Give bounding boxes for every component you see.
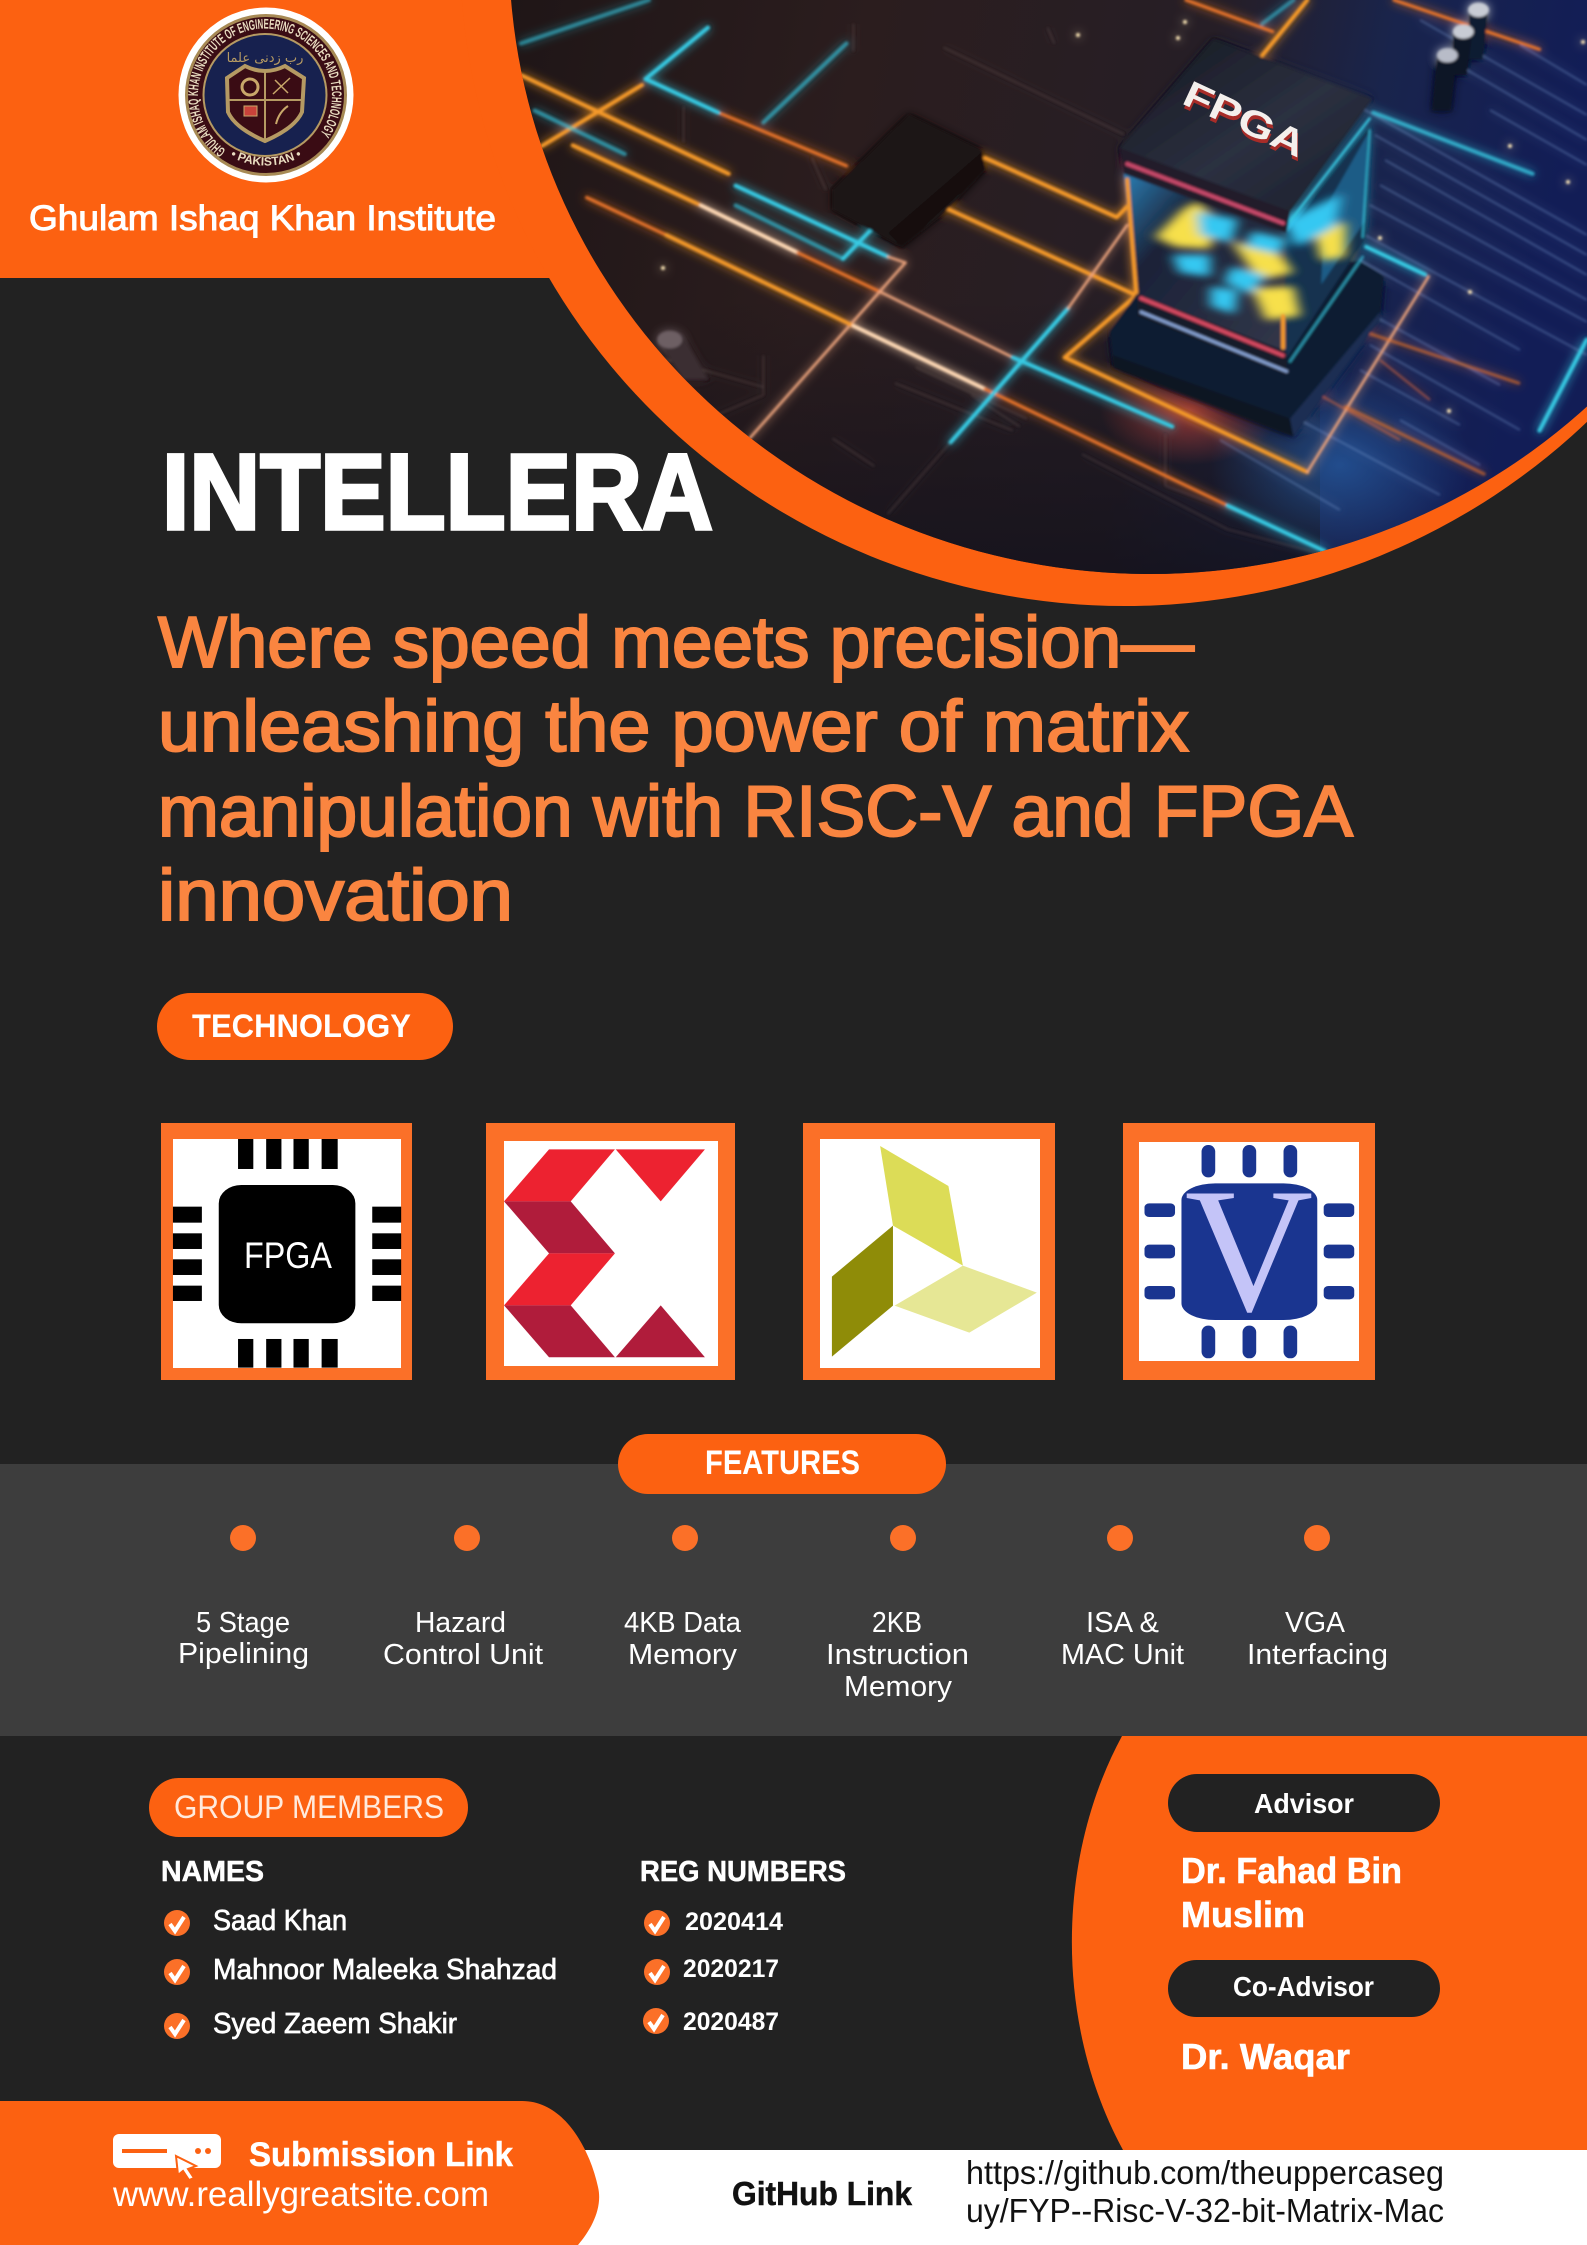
cyan traces	[646, 79, 718, 113]
tagline: innovation	[158, 856, 513, 936]
github url	[966, 2154, 1444, 2229]
large chip body	[1124, 174, 1287, 363]
advisor name: Muslim	[1181, 1894, 1305, 1935]
orange traces	[521, 75, 729, 174]
registration numbers list: 2020487	[683, 2008, 779, 2036]
advisor pill	[1168, 1774, 1440, 1832]
github label: GitHub Link	[732, 2175, 913, 2212]
institute name: Ghulam Ishaq Khan Institute	[29, 199, 496, 238]
technology heading pill: TECHNOLOGY	[192, 1008, 411, 1044]
submission url: www.reallygreatsite.com	[112, 2175, 489, 2214]
large chip base	[1110, 261, 1384, 436]
institute logo: GHULAM ISHAQ KHAN INSTITUTE OF ENGINEERING SCIENCES AND TECHNOLOGY	[188, 18, 342, 156]
chip strips	[1120, 148, 1290, 233]
github url: uy/FYP--Risc-V-32-bit-Matrix-Mac	[966, 2192, 1444, 2229]
feature: hazard control unit: Hazard	[415, 1607, 506, 1639]
feature: 2KB instruction memory: Instruction	[826, 1639, 969, 1671]
names list: Syed Zaeem Shakir	[213, 2008, 457, 2040]
advisor name	[1181, 1850, 1402, 1935]
small dark chip	[833, 115, 985, 247]
advisor pill: Advisor	[1254, 1788, 1354, 1819]
chip top	[1120, 40, 1372, 211]
advisor name: Dr. Fahad Bin	[1181, 1850, 1402, 1891]
hero photo: FPGA chip on circuit board	[480, 0, 1587, 600]
title: INTELLERA	[162, 431, 713, 552]
icon: browser with cursor	[113, 2134, 221, 2180]
feature: 5 stage pipelining: Pipelining	[178, 1638, 309, 1670]
tagline: Where speed meets precision—	[158, 603, 1194, 683]
orange ring around hero photo	[460, 0, 1587, 606]
tagline: manipulation with RISC-V and FPGA	[158, 772, 1353, 852]
group members pill	[149, 1778, 468, 1837]
co-advisor pill: Co-Advisor	[1233, 1971, 1374, 2002]
tagline	[158, 603, 1353, 936]
hero photo: FPGA chip on circuit board: FPGA	[1177, 73, 1312, 165]
co-advisor pill	[1168, 1960, 1440, 2017]
technology card: FPGA chip	[161, 1123, 412, 1380]
header panel: orange institute block	[0, 0, 560, 278]
advisor panel	[1072, 1736, 1587, 2150]
features heading pill: FEATURES	[705, 1444, 860, 1482]
feature: 5 stage pipelining	[178, 1525, 309, 1670]
footer white bar	[500, 2150, 1587, 2245]
group members pill: GROUP MEMBERS	[174, 1789, 444, 1825]
technology card: FPGA chip: FPGA	[244, 1235, 332, 1276]
submission link label: Submission Link	[249, 2136, 513, 2174]
institute logo: رب زدنی علما	[227, 51, 303, 66]
feature: VGA interfacing: Interfacing	[1247, 1639, 1388, 1671]
faint traces left	[652, 24, 1318, 553]
feature: VGA interfacing: VGA	[1285, 1607, 1346, 1639]
feature: 4KB data memory	[624, 1525, 742, 1671]
tagline: unleashing the power of matrix	[158, 687, 1189, 767]
feature: ISA and MAC unit: MAC Unit	[1061, 1639, 1184, 1671]
feature: 2KB instruction memory: Memory	[844, 1671, 953, 1703]
feature: 4KB data memory: 4KB Data	[624, 1607, 742, 1639]
faint traces right	[1220, 20, 1587, 510]
registration numbers list: REG NUMBERS	[640, 1856, 846, 1888]
chip label FPGA: FPGA	[1178, 77, 1313, 169]
names list	[161, 1856, 557, 2040]
technology card: RISC-V chip: V	[1185, 1151, 1313, 1349]
names list: Saad Khan	[213, 1905, 347, 1937]
feature: 2KB instruction memory	[826, 1525, 969, 1703]
registration numbers list: 2020414	[685, 1908, 783, 1936]
sparkles	[661, 20, 1585, 413]
feature: ISA and MAC unit: ISA &	[1086, 1607, 1159, 1639]
github url: https://github.com/theuppercaseg	[966, 2154, 1444, 2191]
names list: Mahnoor Maleeka Shahzad	[213, 1954, 557, 1986]
submission panel	[0, 2101, 599, 2245]
registration numbers list: 2020217	[683, 1955, 779, 1983]
technology card: Xilinx logo	[486, 1123, 735, 1380]
feature: hazard control unit	[383, 1525, 543, 1671]
feature: 2KB instruction memory: 2KB	[872, 1607, 922, 1639]
pixel glow	[1155, 194, 1345, 320]
technology heading pill	[157, 993, 453, 1060]
institute logo: • PAKISTAN •	[232, 152, 300, 166]
feature: 5 stage pipelining: 5 Stage	[196, 1607, 290, 1639]
features band	[0, 1464, 1587, 1736]
small cylinder left	[658, 334, 708, 379]
features heading pill	[618, 1434, 946, 1494]
names list: NAMES	[161, 1856, 264, 1888]
registration numbers list	[640, 1856, 846, 2036]
co-advisor name: Dr. Waqar	[1181, 2036, 1350, 2077]
feature: VGA interfacing	[1247, 1525, 1388, 1671]
feature: hazard control unit: Control Unit	[383, 1639, 543, 1671]
feature: 4KB data memory: Memory	[628, 1639, 738, 1671]
feature: ISA and MAC unit	[1061, 1525, 1184, 1671]
technology card: RISC-V chip	[1123, 1123, 1375, 1380]
cylinders top right	[1469, 12, 1488, 59]
technology card: Vivado logo	[803, 1123, 1055, 1380]
